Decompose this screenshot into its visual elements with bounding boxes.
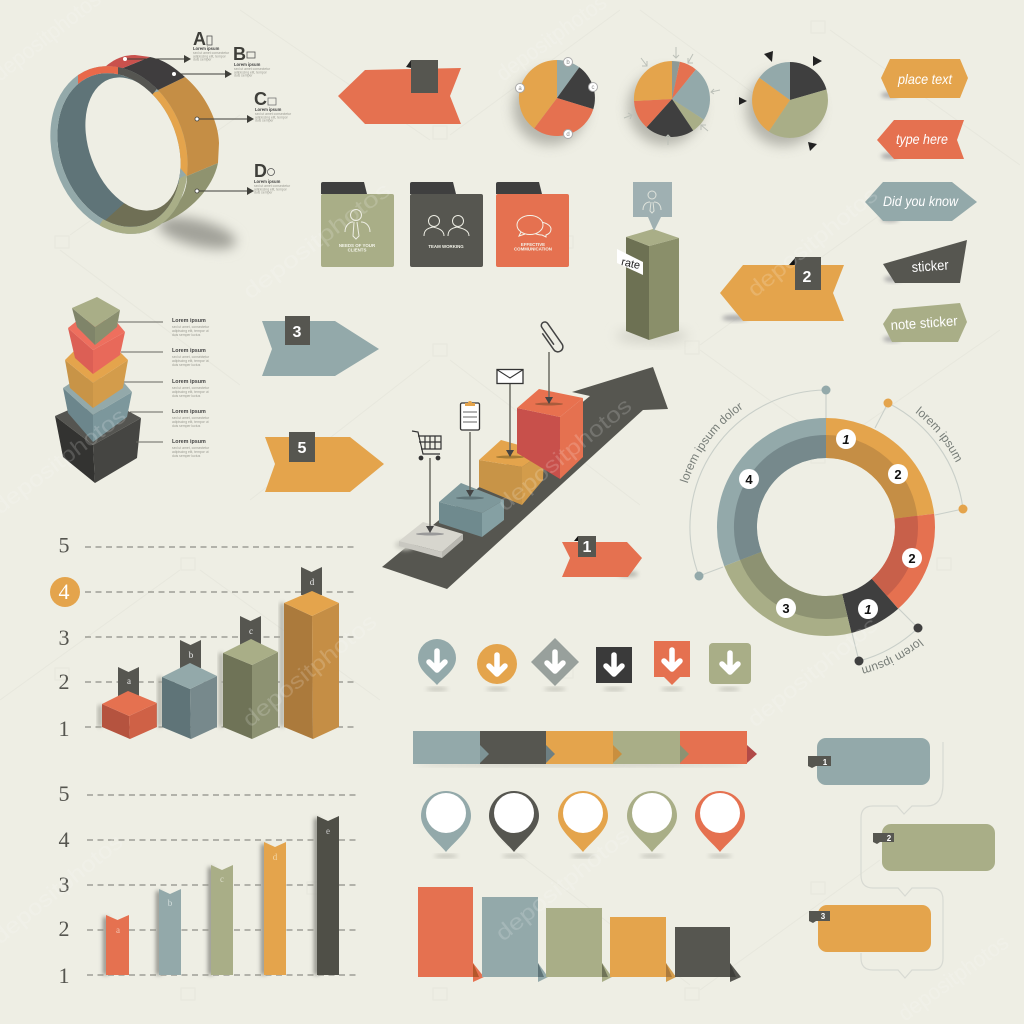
axis numbers: 4 (58, 579, 70, 604)
axis numbers: 3 (58, 872, 70, 897)
label D: D (254, 161, 267, 181)
caption 2: adipiscing elit, tempor ut (172, 359, 209, 363)
descending bars (418, 887, 741, 982)
step orange (479, 440, 544, 505)
arc dots (694, 386, 968, 666)
banner 3: 3 (293, 324, 302, 341)
icon: envelope (497, 370, 523, 384)
bar d: d (273, 852, 278, 862)
ring pointers (123, 55, 254, 195)
pie markers: b (566, 60, 570, 66)
icon: paperclip (537, 321, 565, 354)
grid (85, 547, 355, 727)
label A: Lorem ipsum (193, 46, 220, 51)
caption 4: adipiscing elit, tempor ut (172, 420, 209, 424)
caption 5: duis semper luctus (172, 454, 201, 458)
label D: sed ut amet consectetur (254, 184, 291, 188)
tag letters: d (310, 577, 315, 587)
badges: 1 (842, 432, 850, 447)
caption 5: sed ut amet, consectetur (172, 446, 210, 450)
caption 2: duis semper luctus (172, 363, 201, 367)
icon shadows (426, 688, 740, 690)
banner 3 (262, 316, 379, 376)
sticker: type here: type here (896, 131, 948, 147)
cube orange (65, 350, 128, 408)
banner 1 (562, 536, 642, 577)
pie chart a b c d (513, 58, 598, 145)
badges: 3 (782, 601, 790, 616)
rate column (616, 182, 688, 343)
step red (517, 389, 583, 479)
banner 5: 5 (298, 440, 307, 457)
caption 3: adipiscing elit, tempor ut (172, 390, 209, 394)
caption 1 (172, 318, 210, 337)
bar a: a (116, 925, 120, 935)
map pins row (421, 791, 745, 858)
folder: needs of your clients (321, 182, 394, 267)
callout flow (808, 738, 995, 978)
sticker: note: note sticker (890, 312, 958, 333)
pin shadows (434, 854, 732, 858)
icon: gray diamond (531, 638, 579, 686)
label B: Lorem ipsum (234, 62, 261, 67)
label B: B (233, 44, 246, 64)
bar d (264, 842, 286, 975)
badges: 1 (864, 602, 872, 617)
bar d (280, 591, 339, 739)
pie markers (516, 58, 598, 138)
download icons row (418, 638, 751, 690)
sticker: did you know (865, 182, 977, 222)
grid (87, 795, 357, 975)
axis numbers: 2 (58, 916, 70, 941)
cube red (68, 320, 125, 374)
axis numbers: 2 (58, 669, 70, 694)
watermarks: depositphotos (893, 929, 1013, 1024)
connector line (861, 742, 943, 978)
pie chart with arrows (624, 47, 720, 145)
label B: adipiscing elit, tempor (234, 70, 268, 74)
caption 4: duis semper luctus (172, 424, 201, 428)
caption 3: sed ut amet, consectetur (172, 386, 210, 390)
badges (739, 429, 922, 619)
caption 4 (172, 409, 210, 428)
axis numbers: 4 (58, 827, 70, 852)
folder: effective communication: COMMUNICATION (514, 246, 552, 252)
step light (395, 522, 463, 558)
caption 5: adipiscing elit, tempor ut (172, 450, 209, 454)
callout with person (633, 182, 672, 231)
banner 2: 2 (803, 269, 812, 286)
banner 5 (265, 432, 384, 492)
sticker: dark: sticker (911, 256, 949, 275)
pin orange (558, 791, 608, 852)
bar olive (546, 908, 612, 982)
watermarks: depositphotos (237, 609, 381, 732)
icon: clipboard (460, 401, 480, 430)
small arrows (624, 47, 720, 145)
bar red (418, 887, 484, 982)
sticker: place text (881, 59, 968, 98)
label A: A (193, 29, 206, 49)
sticker: dark (883, 240, 967, 283)
label B: sed ut amet consectetur (234, 67, 271, 71)
caption 2: Lorem ipsum (172, 348, 206, 354)
cube blue (63, 378, 132, 442)
watermarks: depositphotos (742, 182, 882, 302)
badges: 2 (894, 467, 902, 482)
folder: needs of your clients: CLIENTS (348, 248, 366, 252)
flat bar chart (58, 781, 357, 988)
folder: effective communication (496, 182, 569, 267)
arc text: lorem ipsum dolor (680, 403, 742, 483)
label A: duis semper (193, 58, 212, 62)
caption 1: duis semper luctus (172, 333, 201, 337)
pin red (695, 791, 745, 852)
label D (254, 161, 291, 194)
icon: red marker (654, 641, 690, 685)
top red arrow banner (338, 60, 461, 124)
callout 3: 3 (821, 912, 826, 921)
caption 1: sed ut amet, consectetur (172, 325, 210, 329)
bar b: b (168, 898, 173, 908)
label C: Lorem ipsum (255, 107, 282, 112)
ring shadow (155, 211, 239, 255)
tag letters: b (189, 650, 194, 660)
axis numbers: 1 (58, 963, 70, 988)
sticker: did you know: Did you know (883, 193, 959, 209)
folder: effective communication: EFFECTIVE (521, 242, 545, 247)
dark arrow (382, 367, 668, 589)
watermarks: depositphotos (490, 823, 634, 946)
pin blue (421, 791, 471, 852)
watermarks: depositphotos (742, 612, 882, 732)
label B (233, 44, 271, 78)
folder: team working: TEAM WORKING (428, 244, 464, 249)
icon: speech bubbles (517, 216, 551, 237)
cube dark (55, 408, 141, 483)
step blue (439, 483, 504, 537)
axis numbers (58, 781, 70, 988)
label C: adipiscing elit, tempor (255, 116, 289, 120)
label B: duis semper (234, 74, 253, 78)
pie chart with black pointers (739, 51, 828, 151)
badges: 4 (745, 472, 753, 487)
label D: Lorem ipsum (254, 179, 281, 184)
tag letters: a (127, 676, 131, 686)
pointers (416, 352, 563, 536)
caption 3: Lorem ipsum (172, 379, 206, 385)
bar b (159, 889, 181, 975)
icon: two people (424, 216, 469, 236)
label C (254, 89, 292, 122)
label C: sed ut amet consectetur (255, 112, 292, 116)
axis numbers: 5 (58, 532, 70, 558)
icon: olive rounded square (709, 643, 751, 684)
rate tag (617, 249, 643, 275)
growth arrow with steps (382, 321, 668, 589)
bar c (219, 639, 278, 739)
callout 1 (808, 738, 930, 785)
caption 1: Lorem ipsum (172, 318, 206, 324)
icon: blue pin (418, 639, 456, 685)
icon: dark square (596, 647, 632, 683)
pie markers: c (592, 85, 594, 91)
caption 3: duis semper luctus (172, 394, 201, 398)
caption 4: Lorem ipsum (172, 409, 206, 415)
ring chart (32, 29, 292, 255)
icon: cart (412, 431, 441, 460)
bar dark (675, 927, 741, 982)
rate tag: rate (620, 256, 641, 272)
label A: sed ut amet consectetur (193, 51, 230, 55)
ribbon folds (480, 745, 757, 763)
folder: needs of your clients: NEEDS OF YOUR (339, 243, 376, 248)
sticker: note (883, 303, 967, 342)
arc text: lorem ipsum (916, 406, 961, 462)
axis numbers: 5 (58, 781, 70, 806)
stacked cubes (55, 297, 210, 483)
label C: C (254, 89, 267, 109)
callout 1: 1 (823, 758, 828, 767)
banner 1: 1 (583, 539, 592, 556)
bar e: e (326, 826, 330, 836)
bar a (98, 691, 157, 739)
donut segments (737, 438, 915, 616)
ring face (50, 66, 188, 234)
caption 3 (172, 379, 210, 398)
label D: duis semper (254, 190, 273, 194)
tag letters: c (249, 626, 253, 636)
sticker: type here (877, 120, 964, 159)
caption 4: sed ut amet, consectetur (172, 416, 210, 420)
outer arcs (690, 390, 963, 661)
ring outer band segments (105, 55, 219, 230)
axis numbers (50, 532, 80, 741)
tag letters (127, 577, 315, 686)
watermarks: depositphotos (238, 177, 395, 304)
caption 1: adipiscing elit, tempor ut (172, 329, 209, 333)
pie markers: a (518, 86, 522, 92)
bar orange (610, 917, 676, 982)
label D: adipiscing elit, tempor (254, 188, 288, 192)
pin olive (627, 791, 677, 852)
sticker: place text: place text (897, 71, 953, 87)
label C: duis semper (255, 118, 274, 122)
pie markers: d (566, 132, 570, 138)
3d bar chart (50, 532, 355, 741)
label A (193, 29, 230, 62)
caption 5 (172, 439, 210, 458)
watermarks: depositphotos (492, 393, 636, 516)
label A: adipiscing elit, tempor (193, 54, 227, 58)
callout 2: 2 (887, 834, 892, 843)
callout 2 (873, 824, 995, 871)
bar shadows (103, 818, 319, 975)
bar e (317, 816, 339, 975)
arc text: lorem ipsum (862, 638, 924, 674)
bar c: c (220, 874, 224, 884)
donut chart (680, 386, 968, 674)
bar b (158, 663, 217, 739)
callout 3 (809, 905, 931, 952)
banner 2 (720, 257, 844, 321)
arc text (680, 403, 961, 674)
caption 2 (172, 348, 210, 367)
badges: 2 (908, 551, 916, 566)
bar a (106, 915, 129, 975)
bar blue (482, 897, 548, 982)
tags (118, 567, 322, 697)
icon: orange circle (477, 644, 517, 684)
caption 5: Lorem ipsum (172, 439, 206, 445)
segmented ribbon (413, 731, 757, 766)
pin dark (489, 791, 539, 852)
folder: team working (410, 182, 483, 267)
caption 2: sed ut amet, consectetur (172, 355, 210, 359)
cube olive (72, 297, 120, 345)
axis numbers: 1 (58, 716, 70, 741)
axis numbers: 3 (58, 625, 70, 650)
icon: person (345, 210, 370, 239)
black triangles (739, 51, 822, 151)
stack captions (118, 322, 163, 442)
bar c (211, 865, 233, 975)
